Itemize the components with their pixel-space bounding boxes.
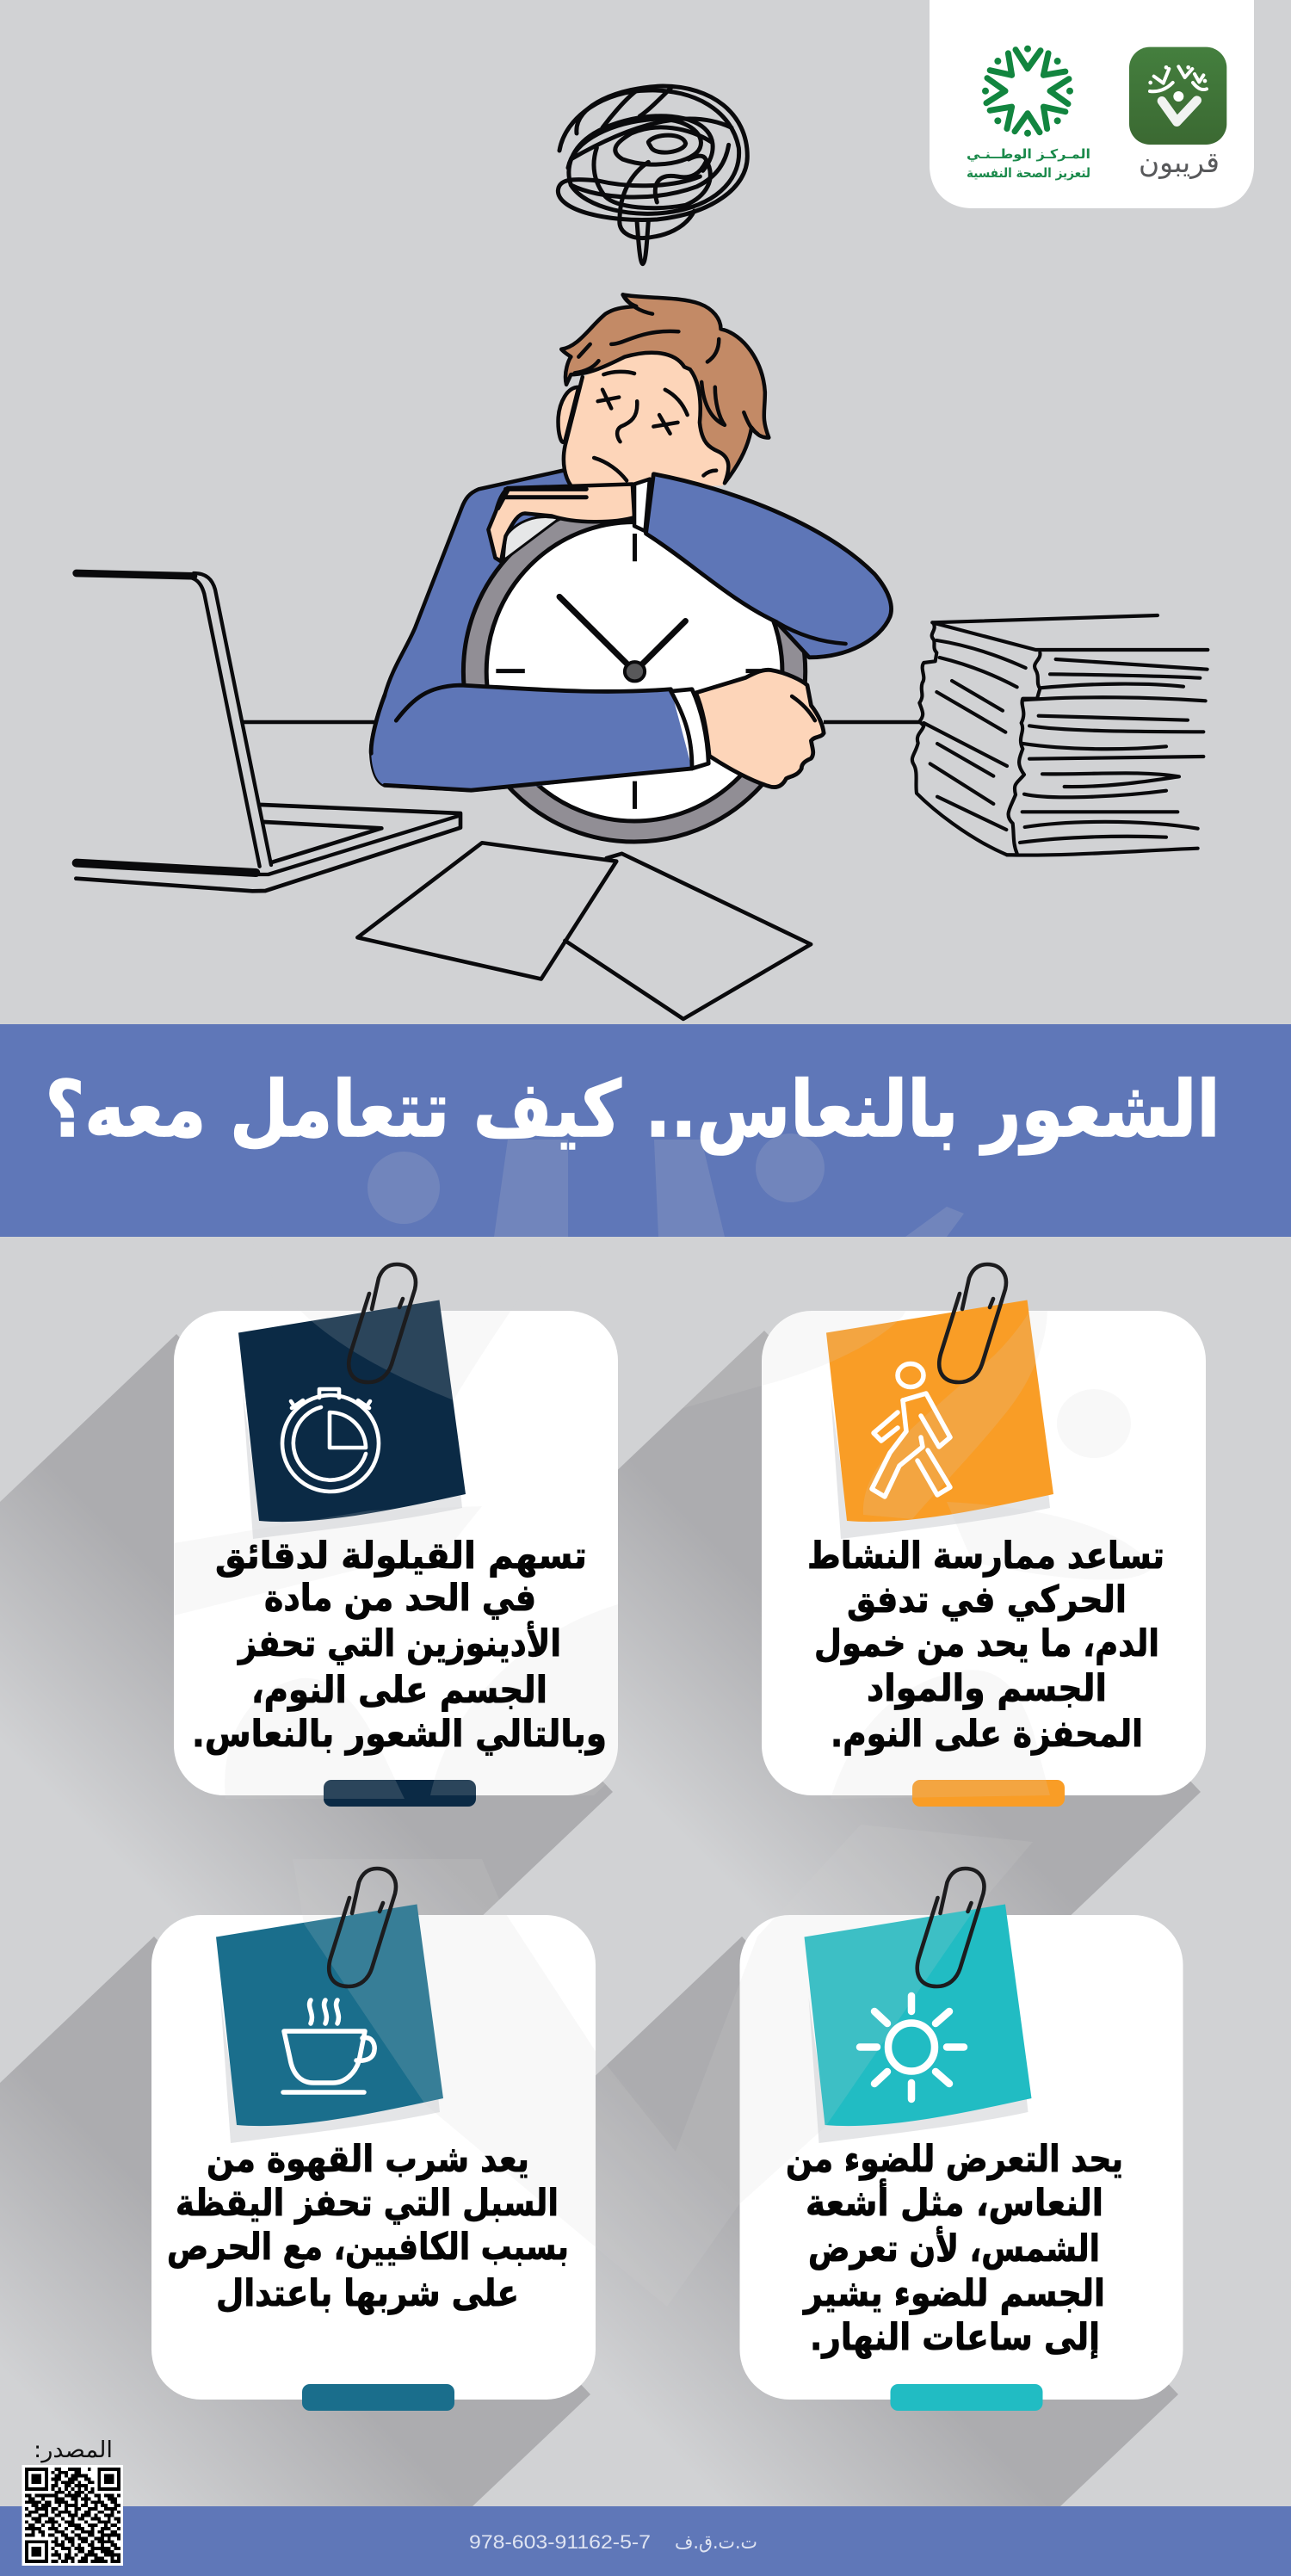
text: light exposure: إلى ساعات النهار. bbox=[810, 2316, 1100, 2359]
text: light exposure: النعاس، مثل أشعة bbox=[806, 2178, 1103, 2225]
text: light exposure: الشمس، لأن تعرض bbox=[808, 2226, 1100, 2270]
illustration: tired man hugging a clock bbox=[371, 294, 892, 842]
illustration: table line bbox=[244, 720, 920, 724]
clock bbox=[463, 501, 806, 842]
title banner bbox=[0, 1024, 1291, 1237]
hair bbox=[561, 294, 769, 483]
torso bbox=[371, 471, 692, 790]
ISBN footer text: ت.ت.ق.ف bbox=[675, 2532, 757, 2554]
upper hand bbox=[488, 484, 634, 561]
card content: coffee bbox=[167, 1869, 569, 2315]
card: nap (base) bbox=[174, 1300, 618, 1807]
upper cuff bbox=[634, 479, 650, 531]
upper arm bbox=[646, 474, 892, 658]
text: nap bbox=[192, 1535, 607, 1756]
source label: المصدر: bbox=[34, 2437, 113, 2463]
logo panel bbox=[930, 0, 1254, 208]
lower hand bbox=[695, 670, 824, 788]
upper sleeve inner bbox=[503, 517, 559, 559]
text: light exposure bbox=[786, 2138, 1123, 2359]
ISBN footer text bbox=[469, 2531, 757, 2554]
text: coffee: بسبب الكافيين، مع الحرص bbox=[167, 2226, 569, 2269]
text: light exposure: الجسم للضوء يشير bbox=[802, 2272, 1105, 2315]
lower cuff bbox=[670, 689, 708, 769]
watermark logo overlay bbox=[174, 1134, 1153, 2307]
ISBN footer text: 978-603-91162-5-7 bbox=[469, 2531, 651, 2553]
text: coffee: السبل التي تحفز اليقظة bbox=[176, 2182, 559, 2225]
illustration: laptop bbox=[76, 573, 460, 891]
wordmark: Qareeboon: قريبون bbox=[1139, 145, 1220, 179]
long card shadows bbox=[0, 1331, 1201, 2506]
text: nap: تسهم القيلولة لدقائق bbox=[215, 1535, 587, 1578]
illustration: loose papers bbox=[357, 843, 811, 1019]
icon: stopwatch bbox=[282, 1389, 379, 1492]
icon: sun bbox=[860, 1996, 964, 2099]
card content: nap bbox=[192, 1264, 607, 1756]
text: physical activity: تساعد ممارسة النشاط bbox=[807, 1535, 1164, 1578]
text: coffee: يعد شرب القهوة من bbox=[207, 2138, 529, 2181]
wordmark: National Center: لتعزيز الصحة النفسية bbox=[967, 165, 1090, 181]
text: physical activity bbox=[807, 1535, 1164, 1756]
logo: National Center emblem bbox=[982, 46, 1073, 137]
text: nap: الأدينوزين التي تحفز bbox=[237, 1621, 561, 1665]
text: nap: وبالتالي الشعور بالنعاس. bbox=[192, 1713, 607, 1756]
logo: Qareeboon app icon bbox=[1129, 47, 1226, 145]
text: nap: الجسم على النوم، bbox=[251, 1669, 547, 1712]
wordmark: National Center bbox=[967, 146, 1090, 181]
card content: physical activity bbox=[807, 1264, 1164, 1756]
text: physical activity: الدم، ما يحد من خمول bbox=[814, 1622, 1159, 1665]
paperclip bbox=[939, 1264, 1006, 1382]
paperclip bbox=[329, 1869, 396, 1986]
card: coffee (base) bbox=[151, 1904, 596, 2411]
text: coffee: على شربها باعتدال bbox=[216, 2272, 519, 2315]
icon: walking person bbox=[872, 1363, 950, 1497]
footer bar bbox=[0, 2506, 1291, 2576]
text: physical activity: المحفزة على النوم. bbox=[831, 1713, 1143, 1756]
wordmark: National Center: المـركـز الوطــنـي bbox=[967, 146, 1090, 162]
card content: light exposure bbox=[786, 1869, 1123, 2359]
card: light exposure (base) bbox=[740, 1904, 1183, 2411]
paperclip bbox=[917, 1869, 984, 1986]
face bbox=[598, 390, 619, 408]
text: light exposure: يحد التعرض للضوء من bbox=[786, 2138, 1123, 2181]
text: physical activity: الجسم والمواد bbox=[867, 1667, 1107, 1710]
head bbox=[559, 294, 769, 488]
text: coffee bbox=[167, 2138, 569, 2315]
icon: coffee cup bbox=[283, 2000, 374, 2092]
card: physical activity (base) bbox=[762, 1300, 1206, 1807]
QR code bbox=[22, 2465, 123, 2566]
lower sleeve bbox=[371, 685, 692, 790]
scribble thought bubble bbox=[558, 86, 747, 264]
illustration: stack of papers bbox=[912, 615, 1208, 856]
text: physical activity: الحركي في تدفق bbox=[847, 1578, 1127, 1622]
paperclip bbox=[349, 1264, 416, 1382]
text: nap: في الحد من مادة bbox=[264, 1577, 536, 1620]
